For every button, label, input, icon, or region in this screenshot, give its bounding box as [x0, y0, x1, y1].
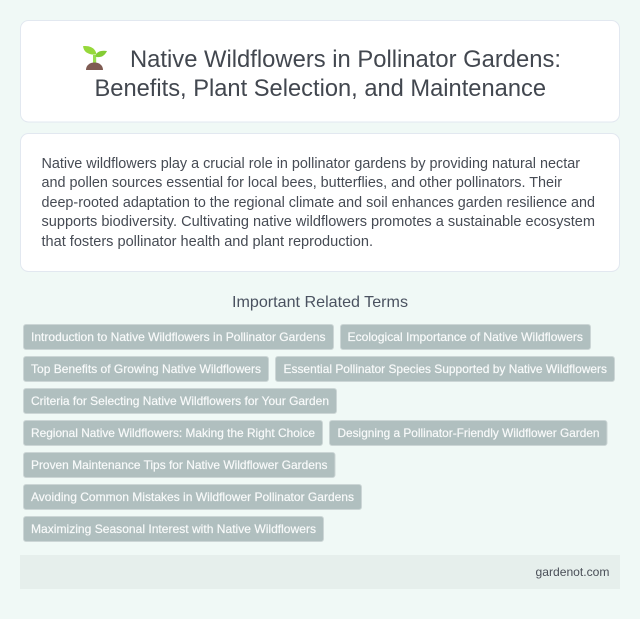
description text: supports biodiversity. Cultivating native wildflowers promotes a sustainable ecosystem: [42, 214, 595, 230]
tag: Top Benefits of Growing Native Wildflowers: [31, 362, 261, 376]
panel: title: [20, 20, 620, 122]
description text: that fosters pollinator health and plant reproduction.: [42, 234, 373, 250]
tag: Proven Maintenance Tips for Native Wildflower Gardens: [31, 458, 328, 472]
tag: [330, 420, 607, 446]
tag: [24, 420, 322, 446]
tag: Regional Native Wildflowers: Making the Right Choice: [31, 426, 315, 440]
tag: Ecological Importance of Native Wildflowers: [348, 330, 583, 344]
description text: Native wildflowers play a crucial role in pollinator gardens by providing natural nectar: [42, 156, 580, 172]
footer: [20, 555, 620, 589]
tag: [276, 356, 614, 382]
tag: [24, 484, 362, 510]
title text: [94, 46, 561, 102]
title text: Benefits, Plant Selection, and Maintenance: [94, 75, 546, 102]
footer source text: gardenot.com: [536, 565, 610, 579]
tag list: [24, 324, 614, 542]
tag: Maximizing Seasonal Interest with Native Wildflowers: [31, 522, 316, 536]
tag: Criteria for Selecting Native Wildflowers for Your Garden: [31, 394, 329, 408]
tag: Designing a Pollinator-Friendly Wildflower Garden: [338, 426, 600, 440]
heading: related terms: Important Related Terms: [232, 294, 408, 311]
tag: [24, 356, 268, 382]
description text: [42, 156, 595, 250]
tag: Avoiding Common Mistakes in Wildflower Pollinator Gardens: [31, 490, 354, 504]
tag: [340, 324, 590, 350]
title text: Native Wildflowers in Pollinator Gardens:: [130, 46, 561, 73]
tag: Introduction to Native Wildflowers in Pollinator Gardens: [31, 330, 326, 344]
tag: [24, 388, 336, 414]
tag: [24, 324, 334, 350]
tag: [24, 452, 335, 478]
icon: sprout: [83, 46, 107, 70]
description text: and pollen sources essential for local bees, butterflies, and other pollinators. Their: [42, 175, 562, 191]
tag: [24, 516, 324, 542]
description text: deep-rooted adaptation to the regional climate and soil enhances garden resilience and: [42, 195, 595, 211]
panel: description: [20, 134, 620, 272]
tag: Essential Pollinator Species Supported by Native Wildflowers: [284, 362, 607, 376]
